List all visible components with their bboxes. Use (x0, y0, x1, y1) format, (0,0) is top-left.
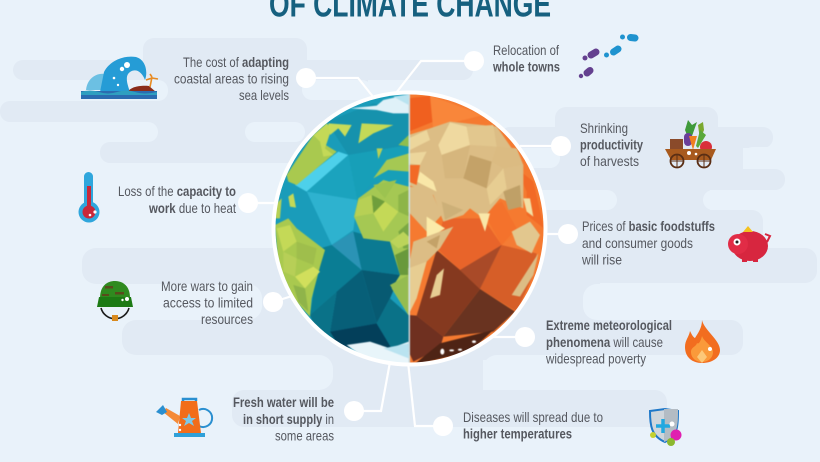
item: relocation (492, 34, 635, 78)
globe (270, 90, 549, 368)
text: Shrinking (580, 120, 628, 136)
item: wars: resources (201, 311, 253, 327)
item: prices: and consumer goods (582, 235, 693, 251)
item: coastal costs: coastal areas to rising (174, 70, 289, 86)
item: diseases (463, 409, 682, 446)
item: diseases: higher temperatures (463, 426, 572, 442)
item: prices: will rise (581, 252, 622, 268)
connector lines (248, 61, 568, 426)
item: fresh water: in short supply in (243, 411, 334, 427)
icon: vegetable cart (665, 120, 716, 168)
item: fresh water: some areas (275, 428, 334, 444)
icon: ocean wave and island (81, 57, 158, 99)
north america and greenland (275, 123, 409, 218)
icon: thermometer (78, 172, 100, 222)
icon: army helmet (97, 281, 133, 321)
text: Prices of basic foodstuffs (582, 218, 715, 234)
item: heat: work due to heat (148, 200, 236, 216)
text: The cost of adapting (183, 54, 289, 70)
item: coastal costs (81, 54, 289, 103)
item: fresh water (156, 394, 334, 444)
text: Fresh water will be (233, 394, 334, 410)
connector dots (238, 51, 578, 436)
item: extreme weather: phenomena will cause (546, 334, 663, 350)
text: Loss of the capacity to (118, 183, 236, 199)
item: coastal costs: sea levels (239, 87, 289, 103)
item: wars: access to limited (163, 294, 253, 310)
item: wars (97, 278, 253, 327)
item: prices (581, 218, 770, 268)
item: heat (78, 172, 236, 222)
antarctic rocks (440, 340, 476, 355)
item: extreme weather: widespread poverty (545, 350, 646, 366)
item: harvests: of harvests (580, 153, 639, 169)
text: More wars to gain (161, 278, 253, 294)
eurasia, tan half (408, 122, 540, 315)
ocean half (270, 92, 409, 368)
south america (275, 218, 325, 317)
warm half (409, 92, 549, 368)
africa, green half (354, 180, 410, 316)
text: Extreme meteorological (546, 317, 672, 333)
icon: shield and germs (650, 409, 682, 446)
polar ice (347, 94, 410, 365)
icon: piggy bank (728, 226, 770, 262)
item: harvests: productivity (580, 136, 643, 152)
text: Diseases will spread due to (463, 409, 603, 425)
icon: watering can (156, 399, 212, 437)
icon: flame (685, 320, 720, 363)
item: harvests (580, 120, 716, 169)
item: extreme weather (545, 317, 720, 366)
text: Relocation of (493, 42, 559, 58)
item: relocation: whole towns (492, 58, 560, 74)
icon: footprints (579, 34, 635, 78)
